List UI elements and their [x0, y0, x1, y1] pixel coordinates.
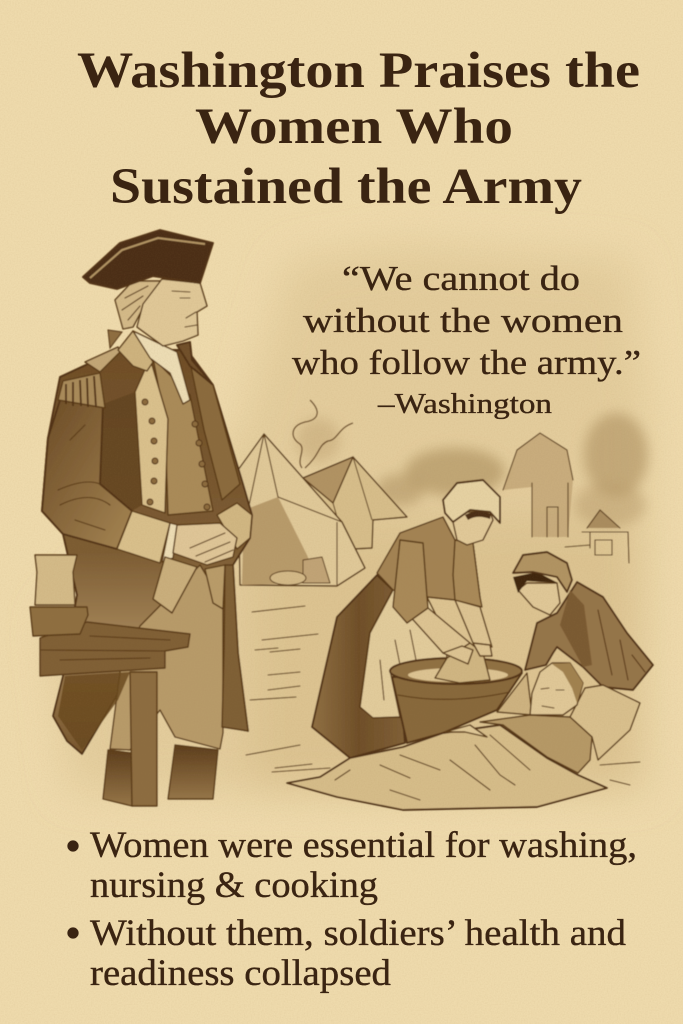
- bullet: essential work: nursing & cooking: [90, 865, 378, 906]
- bullet: essential work: [68, 825, 637, 906]
- pocket flaps: [153, 557, 225, 613]
- breeches: [110, 565, 223, 750]
- hair: [513, 572, 558, 593]
- illustration: camp scene: [30, 230, 653, 810]
- bullet: essential work: Women were essential for washing,: [90, 825, 637, 866]
- title: Washington Praises the: [77, 43, 640, 99]
- quote: [292, 259, 641, 420]
- hands: [173, 523, 237, 565]
- rear tent: [303, 457, 407, 550]
- skirt: [312, 575, 405, 758]
- small house: [565, 510, 629, 563]
- books: [30, 607, 88, 636]
- title: Sustained the Army: [110, 159, 582, 215]
- cravat: [133, 331, 190, 404]
- coat tail left shading: [58, 672, 130, 750]
- coat tail right: [222, 565, 248, 731]
- hair: [552, 663, 583, 703]
- body: [525, 582, 653, 690]
- figure: George Washington: [42, 230, 252, 806]
- collar: [118, 331, 153, 371]
- wash basin: [390, 643, 522, 743]
- waistcoat: [153, 358, 213, 515]
- building: [503, 433, 573, 537]
- sleeve and forearm right: [453, 540, 492, 647]
- face: [453, 512, 493, 545]
- bodice: [377, 517, 480, 600]
- right cuff: [217, 503, 252, 549]
- blanket: [287, 725, 607, 810]
- soldier hand: [445, 725, 487, 737]
- washing hands: [443, 643, 492, 664]
- figure: woman nursing: [513, 552, 653, 690]
- hair: [465, 511, 491, 520]
- lapel: [135, 358, 168, 513]
- quote: without the women: [303, 301, 623, 340]
- face: [518, 583, 560, 615]
- bullet: readiness: [68, 913, 627, 994]
- coat buttons: [142, 399, 210, 510]
- front tent: [238, 434, 365, 586]
- quote: “We cannot do: [342, 259, 580, 298]
- attribution: –Washington: [377, 389, 552, 420]
- figure: woman washing: [312, 480, 500, 758]
- apron: [360, 590, 447, 718]
- title: [77, 43, 640, 215]
- soldier face: [541, 688, 564, 708]
- table top: [40, 622, 190, 676]
- bullet list: [68, 825, 637, 994]
- ground strokes: [246, 606, 330, 772]
- tents: [238, 434, 407, 586]
- figure: wounded soldier in bed: [287, 663, 640, 810]
- jug: [35, 555, 77, 605]
- shoulder strap: [85, 347, 120, 372]
- coat: [42, 350, 252, 754]
- coat right front: [190, 362, 240, 500]
- boots: [103, 745, 218, 806]
- tricorn hat: [83, 230, 213, 289]
- bullet: readiness: readiness collapsed: [90, 953, 392, 994]
- sepia wash background: [50, 245, 648, 795]
- table leg: [130, 672, 157, 806]
- chest shadow: [100, 392, 142, 511]
- epaulette: [58, 373, 105, 408]
- sleeve and forearm left: [393, 540, 470, 663]
- shirt: [480, 715, 592, 773]
- distant trees and ruins: [376, 413, 648, 563]
- head scarf: [513, 552, 572, 592]
- right ground strokes: [275, 762, 640, 785]
- quote: who follow the army.”: [292, 343, 641, 382]
- cuff left: [117, 511, 170, 563]
- wet cloth: [435, 643, 490, 683]
- title: Women Who: [195, 99, 513, 155]
- smoke: [293, 400, 353, 468]
- sleeve: [42, 400, 132, 549]
- pillows: [497, 673, 640, 760]
- hair: [115, 281, 162, 329]
- bullet: readiness: Without them, soldiers’ health and: [90, 913, 627, 954]
- face: [137, 279, 207, 346]
- head: [530, 663, 583, 715]
- bonnet: [443, 480, 500, 523]
- hair ribbon: [108, 330, 122, 348]
- table with jug and books: [30, 555, 190, 806]
